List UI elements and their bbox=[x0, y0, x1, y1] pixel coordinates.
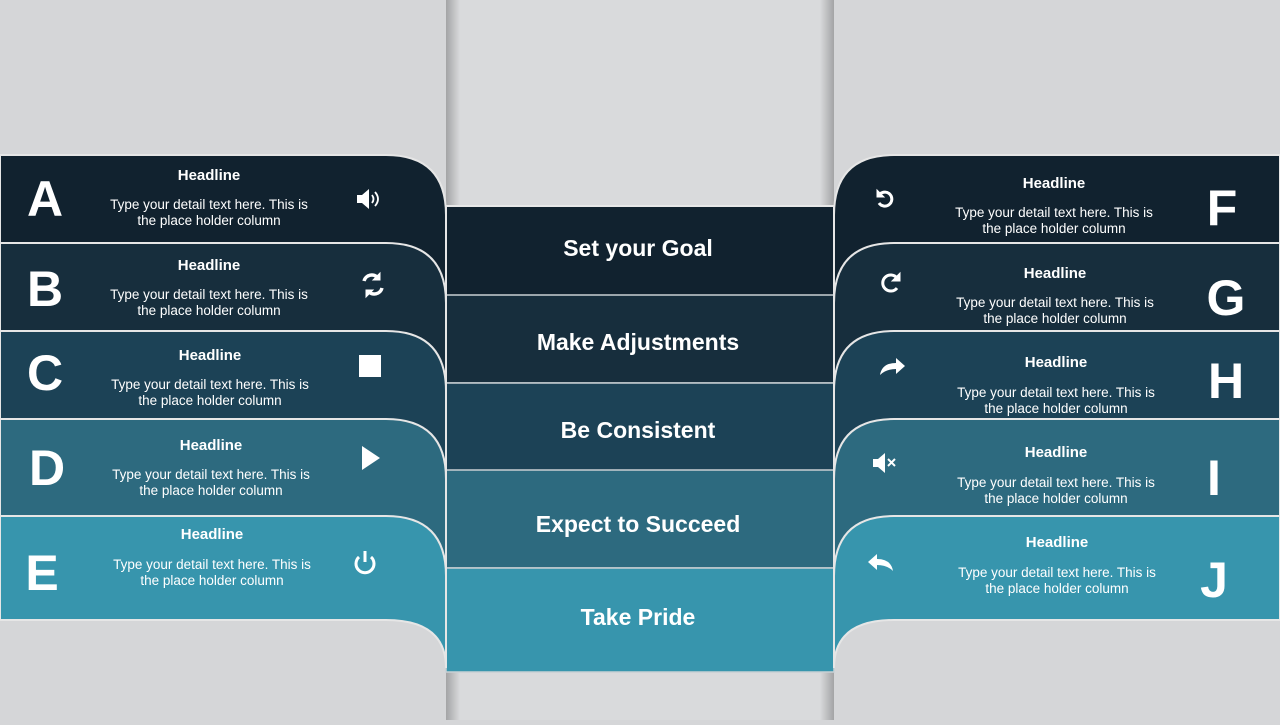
right tab texts: F bbox=[1207, 180, 1237, 236]
left tab texts: Headline bbox=[180, 437, 242, 454]
left tab texts: Type your detail text here. This is bbox=[111, 377, 309, 392]
right tabs bbox=[834, 155, 1280, 668]
left tab texts: Type your detail text here. This is bbox=[110, 197, 308, 212]
icon: mute bbox=[873, 453, 895, 473]
center steps: Be Consistent bbox=[561, 417, 716, 443]
background strip bbox=[446, 0, 834, 720]
left tab texts: the place holder column bbox=[139, 483, 283, 498]
right tab texts: G bbox=[1207, 270, 1245, 326]
icon: rotate cw bbox=[883, 273, 900, 291]
left tab texts: Type your detail text here. This is bbox=[112, 467, 310, 482]
icon: power bbox=[356, 551, 374, 573]
icon: speaker bbox=[357, 189, 378, 209]
left tab texts: Type your detail text here. This is bbox=[110, 287, 308, 302]
left tab texts: E bbox=[25, 545, 59, 601]
left tab texts bbox=[25, 167, 311, 601]
left tab texts: the place holder column bbox=[140, 573, 284, 588]
left tab texts: A bbox=[27, 171, 63, 227]
right tab texts: Headline bbox=[1024, 265, 1086, 282]
icon: refresh bbox=[364, 273, 382, 297]
left tab texts: Headline bbox=[179, 347, 241, 364]
icon: reply arrow bbox=[868, 554, 893, 571]
right tab texts: the place holder column bbox=[984, 401, 1128, 416]
left tab texts: C bbox=[27, 345, 63, 401]
left tab texts: D bbox=[29, 440, 65, 496]
left tab texts: Headline bbox=[178, 167, 240, 184]
right tab texts: J bbox=[1200, 552, 1228, 608]
right tab texts: Type your detail text here. This is bbox=[955, 205, 1153, 220]
right tab texts: Type your detail text here. This is bbox=[958, 565, 1156, 580]
right tab texts: Headline bbox=[1026, 534, 1088, 551]
right tab texts: Type your detail text here. This is bbox=[957, 385, 1155, 400]
right tab texts: H bbox=[1208, 353, 1244, 409]
right tab texts: the place holder column bbox=[982, 221, 1126, 236]
left tab texts: Type your detail text here. This is bbox=[113, 557, 311, 572]
left tabs bbox=[0, 155, 446, 668]
center steps: Make Adjustments bbox=[537, 329, 739, 355]
right tab texts: Type your detail text here. This is bbox=[956, 295, 1154, 310]
right tab texts: Headline bbox=[1023, 175, 1085, 192]
left tab texts: the place holder column bbox=[138, 393, 282, 408]
icon: stop bbox=[359, 355, 381, 377]
center steps bbox=[446, 206, 834, 672]
left tab texts: B bbox=[27, 261, 63, 317]
icon: play bbox=[362, 446, 380, 470]
left tab texts: the place holder column bbox=[137, 213, 281, 228]
right tab texts: I bbox=[1207, 450, 1221, 506]
left tab texts: Headline bbox=[181, 526, 243, 543]
icon: share arrow bbox=[880, 358, 905, 375]
center steps: Set your Goal bbox=[563, 235, 713, 261]
right tab texts bbox=[955, 175, 1245, 608]
left tab texts: the place holder column bbox=[137, 303, 281, 318]
right tab texts: the place holder column bbox=[984, 491, 1128, 506]
right tab texts: Headline bbox=[1025, 354, 1087, 371]
center steps: Take Pride bbox=[581, 604, 695, 630]
right tab texts: the place holder column bbox=[985, 581, 1129, 596]
right tab texts: the place holder column bbox=[983, 311, 1127, 326]
left tab texts: Headline bbox=[178, 257, 240, 274]
right tab texts: Headline bbox=[1025, 444, 1087, 461]
right tab texts: Type your detail text here. This is bbox=[957, 475, 1155, 490]
icon: rotate ccw bbox=[877, 190, 892, 206]
center steps: Expect to Succeed bbox=[536, 511, 740, 537]
